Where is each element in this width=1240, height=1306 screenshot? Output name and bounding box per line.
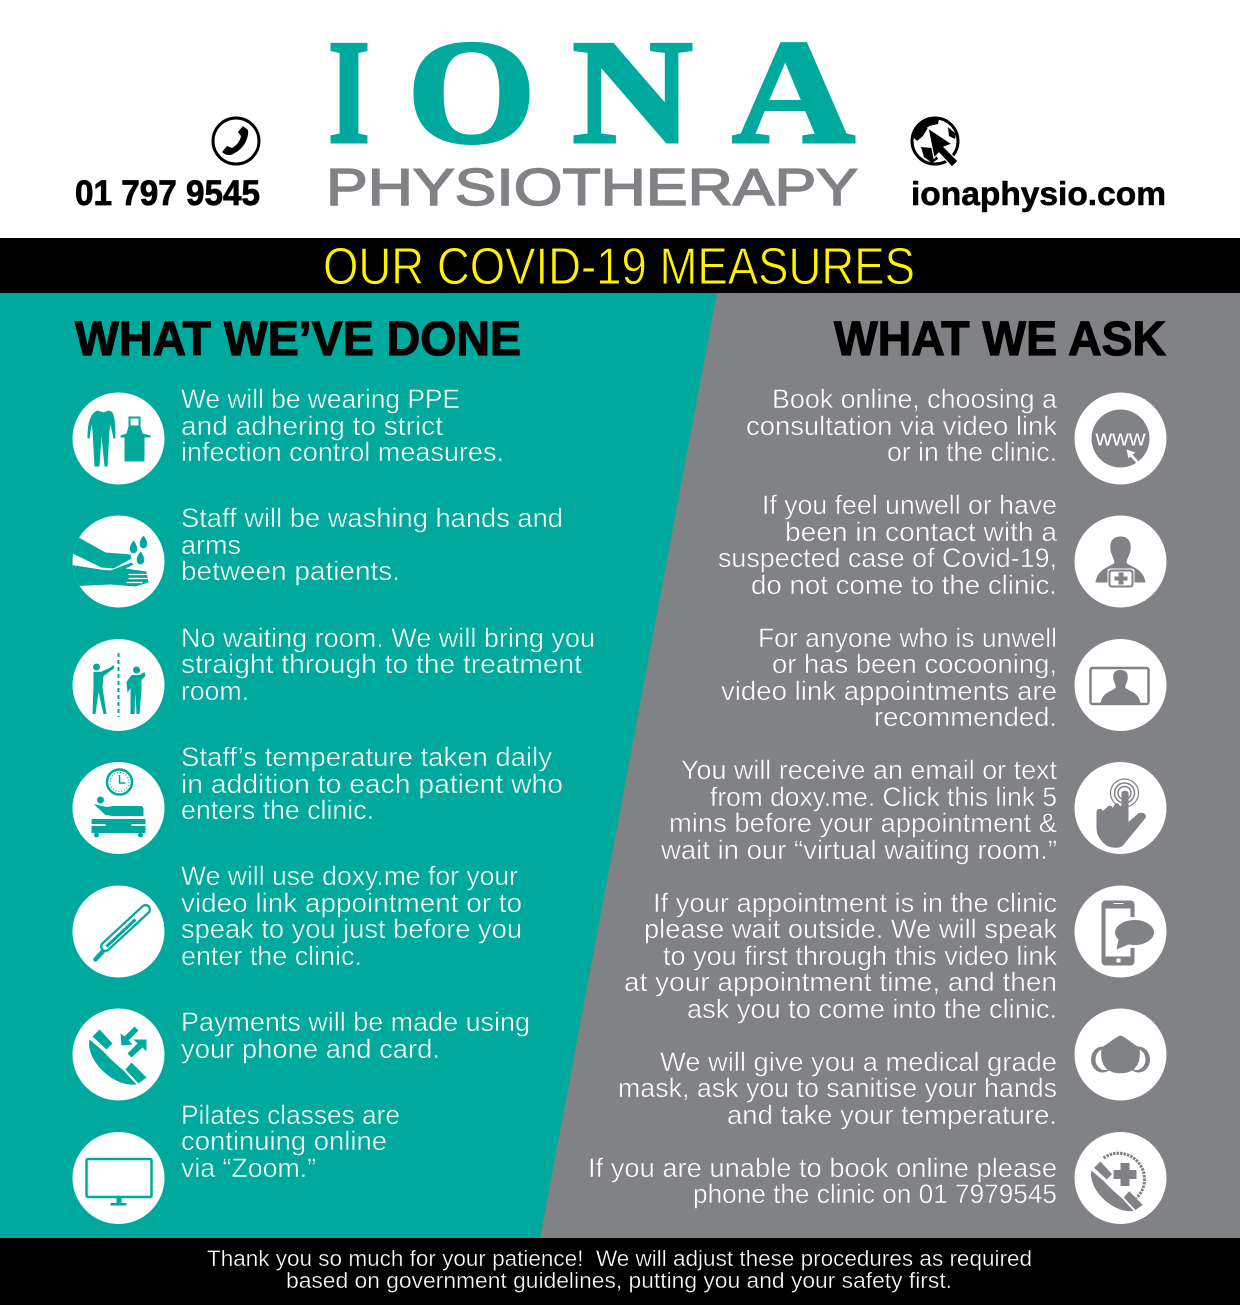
icon: monitor bbox=[72, 1132, 164, 1224]
text: email or text: wait in our “virtual waiting room.” bbox=[660, 835, 1057, 865]
text: washing hands: between patients. bbox=[181, 556, 400, 586]
heading: what we ask: WHAT WE ASK bbox=[834, 313, 1166, 366]
text: no waiting room bbox=[181, 623, 595, 706]
left column text bbox=[181, 384, 595, 1183]
text: wait outside: If your appointment is in the clinic bbox=[653, 888, 1057, 918]
text: cocooning: or has been cocooning, bbox=[772, 649, 1057, 679]
text: wait outside: please wait outside. We will speak bbox=[644, 914, 1058, 944]
logo wordmark IONA: A bbox=[732, 10, 855, 175]
text: feel unwell: do not come to the clinic. bbox=[751, 570, 1057, 600]
logo wordmark IONA bbox=[328, 10, 855, 175]
text: temperature bbox=[181, 742, 563, 825]
logo: IONA Physiotherapy bbox=[326, 10, 858, 217]
panel: what we've done background bbox=[0, 293, 717, 1238]
website contact bbox=[911, 118, 1166, 212]
logo wordmark IONA: O bbox=[407, 10, 536, 175]
text: temperature: in addition to each patient who bbox=[181, 769, 563, 799]
text: medical mask bbox=[618, 1047, 1057, 1130]
icon: globe with cursor bbox=[912, 118, 958, 167]
text: wait outside: ask you to come into the clinic. bbox=[687, 994, 1057, 1024]
text: medical mask: mask, ask you to sanitise your hands bbox=[618, 1073, 1057, 1103]
icon: PPE suit and apron bbox=[72, 392, 164, 484]
text: medical mask: We will give you a medical grade bbox=[660, 1047, 1057, 1077]
logo subtitle: PHYSIOTHERAPY bbox=[326, 159, 858, 217]
text: wait outside: to you first through this video link bbox=[663, 941, 1058, 971]
icon: smartphone with speech bubble bbox=[1074, 886, 1166, 978]
text: wait outside bbox=[624, 888, 1058, 1024]
text: cocooning: For anyone who is unwell bbox=[758, 623, 1057, 653]
title: OUR COVID-19 MEASURES bbox=[323, 238, 915, 296]
text: feel unwell: been in contact with a bbox=[785, 517, 1057, 547]
text: no waiting room: straight through to the treatment bbox=[181, 649, 583, 679]
text: washing hands: arms bbox=[181, 530, 241, 560]
text: payments bbox=[181, 1007, 530, 1064]
text: PPE bbox=[181, 384, 504, 467]
text: cocooning bbox=[721, 623, 1057, 732]
text: wait outside: at your appointment time, and then bbox=[624, 967, 1057, 997]
text: washing hands bbox=[181, 503, 563, 586]
text: book online bbox=[746, 384, 1058, 467]
logo wordmark IONA: I bbox=[328, 10, 370, 175]
phone number: 01 797 9545 bbox=[75, 174, 260, 213]
text: medical mask: and take your temperature. bbox=[727, 1100, 1057, 1130]
text: phone the clinic: phone the clinic on 01 7979545 bbox=[693, 1179, 1057, 1209]
left column icons bbox=[68, 392, 164, 1224]
right column text bbox=[588, 384, 1058, 1209]
text: book online: consultation via video link bbox=[746, 411, 1058, 441]
text: PPE: infection control measures. bbox=[181, 437, 504, 467]
text: email or text: You will receive an email or text bbox=[681, 755, 1058, 785]
right column icons bbox=[1074, 392, 1166, 1224]
text: email or text bbox=[660, 755, 1058, 865]
icon: clock and patient on bed bbox=[72, 762, 164, 854]
text: book online: Book online, choosing a bbox=[772, 384, 1057, 414]
icon: phone with arrows bbox=[72, 1008, 164, 1100]
panel: what we ask background bbox=[0, 293, 1240, 1238]
text: pilates bbox=[181, 1100, 400, 1183]
text: doxy.me bbox=[181, 861, 522, 971]
icon: social distancing figures bbox=[72, 639, 164, 731]
icon: www cursor: www bbox=[1094, 426, 1146, 450]
icon: phone with medical cross bbox=[1074, 1132, 1166, 1224]
website address: ionaphysio.com bbox=[911, 175, 1166, 212]
text: PPE: and adhering to strict bbox=[181, 411, 444, 441]
footer message bbox=[207, 1246, 1032, 1293]
heading: what we've done: WHAT WE’VE DONE bbox=[75, 313, 521, 366]
text: pilates: Pilates classes are bbox=[181, 1100, 400, 1130]
icon: hand touching bbox=[1074, 762, 1166, 854]
footer message: based on government guidelines, putting you and your safety first. bbox=[286, 1268, 952, 1293]
text: email or text: mins before your appointment & bbox=[669, 808, 1057, 838]
text: no waiting room: room. bbox=[181, 676, 249, 706]
icon: telephone bbox=[213, 118, 259, 164]
text: payments: your phone and card. bbox=[181, 1034, 440, 1064]
icon: video call bbox=[1074, 639, 1166, 731]
text: feel unwell bbox=[718, 490, 1057, 600]
icon: face mask bbox=[1074, 1008, 1166, 1100]
phone contact bbox=[75, 118, 260, 213]
icon: thermometer bbox=[72, 886, 164, 978]
title band bbox=[0, 238, 1240, 296]
text: feel unwell: suspected case of Covid-19, bbox=[718, 543, 1057, 573]
text: pilates: via “Zoom.” bbox=[181, 1153, 316, 1183]
text: cocooning: video link appointments are bbox=[721, 676, 1057, 706]
text: pilates: continuing online bbox=[181, 1126, 387, 1156]
text: cocooning: recommended. bbox=[874, 702, 1057, 732]
icon: www cursor bbox=[1074, 392, 1166, 484]
text: no waiting room: No waiting room. We will bring you bbox=[181, 623, 595, 653]
text: doxy.me: enter the clinic. bbox=[181, 941, 362, 971]
text: book online: or in the clinic. bbox=[887, 437, 1057, 467]
text: feel unwell: If you feel unwell or have bbox=[762, 490, 1057, 520]
text: temperature: enters the clinic. bbox=[181, 795, 374, 825]
text: doxy.me: We will use doxy.me for your bbox=[181, 861, 518, 891]
text: phone the clinic bbox=[588, 1153, 1057, 1209]
text: washing hands: Staff will be washing hands and bbox=[181, 503, 563, 533]
text: email or text: from doxy.me. Click this link 5 bbox=[710, 782, 1057, 812]
logo wordmark IONA: N bbox=[572, 10, 693, 175]
icon: washing hands bbox=[68, 516, 164, 608]
text: temperature: Staff’s temperature taken daily bbox=[181, 742, 553, 772]
text: payments: Payments will be made using bbox=[181, 1007, 530, 1037]
text: PPE: We will be wearing PPE bbox=[181, 384, 460, 414]
text: doxy.me: speak to you just before you bbox=[181, 914, 522, 944]
footer message: Thank you so much for your patience! We will adjust these procedures as required bbox=[207, 1246, 1032, 1271]
text: phone the clinic: If you are unable to book online please bbox=[588, 1153, 1057, 1183]
text: doxy.me: video link appointment or to bbox=[181, 888, 522, 918]
icon: doctor silhouette bbox=[1074, 516, 1166, 608]
footer band bbox=[0, 1238, 1240, 1305]
